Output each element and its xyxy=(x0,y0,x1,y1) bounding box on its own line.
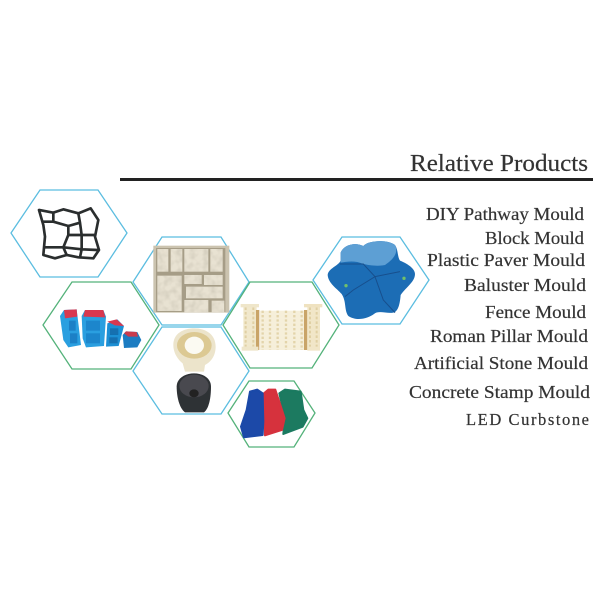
product: block moulds xyxy=(60,309,141,348)
product list xyxy=(409,204,590,429)
hexagon: DIY pathway mould xyxy=(11,190,127,277)
hexagon: concrete stamp mould xyxy=(313,237,429,324)
hexagon: baluster mould xyxy=(133,327,249,414)
hexagon: fence mould xyxy=(223,282,339,368)
label: Block Mould: Block Mould xyxy=(485,228,584,248)
label: Fence Mould: Fence Mould xyxy=(485,302,586,322)
title: Relative Products xyxy=(410,151,588,177)
product: curbstones xyxy=(241,390,307,437)
title rule xyxy=(120,178,593,181)
label: Concrete Stamp Mould: Concrete Stamp Mould xyxy=(409,382,590,402)
product: concrete stamp xyxy=(328,241,415,319)
hexagon: plastic paver mould xyxy=(133,237,249,325)
hexagon: curbstone mould xyxy=(228,381,315,447)
label: Roman Pillar Mould: Roman Pillar Mould xyxy=(430,326,588,346)
product: fence mould xyxy=(241,304,322,351)
label: DIY Pathway Mould: DIY Pathway Mould xyxy=(426,204,584,224)
label: Baluster Mould: Baluster Mould xyxy=(464,275,586,295)
product: stone paver mould xyxy=(153,246,229,313)
hexagon: block mould xyxy=(43,282,159,369)
label: LED Curbstone: LED Curbstone xyxy=(466,410,589,429)
label: Artificial Stone Mould: Artificial Stone Mould xyxy=(414,353,588,373)
product: pathway mould xyxy=(39,208,99,258)
product: baluster mould pots xyxy=(173,328,216,412)
label: Plastic Paver Mould: Plastic Paver Mould xyxy=(427,250,585,270)
